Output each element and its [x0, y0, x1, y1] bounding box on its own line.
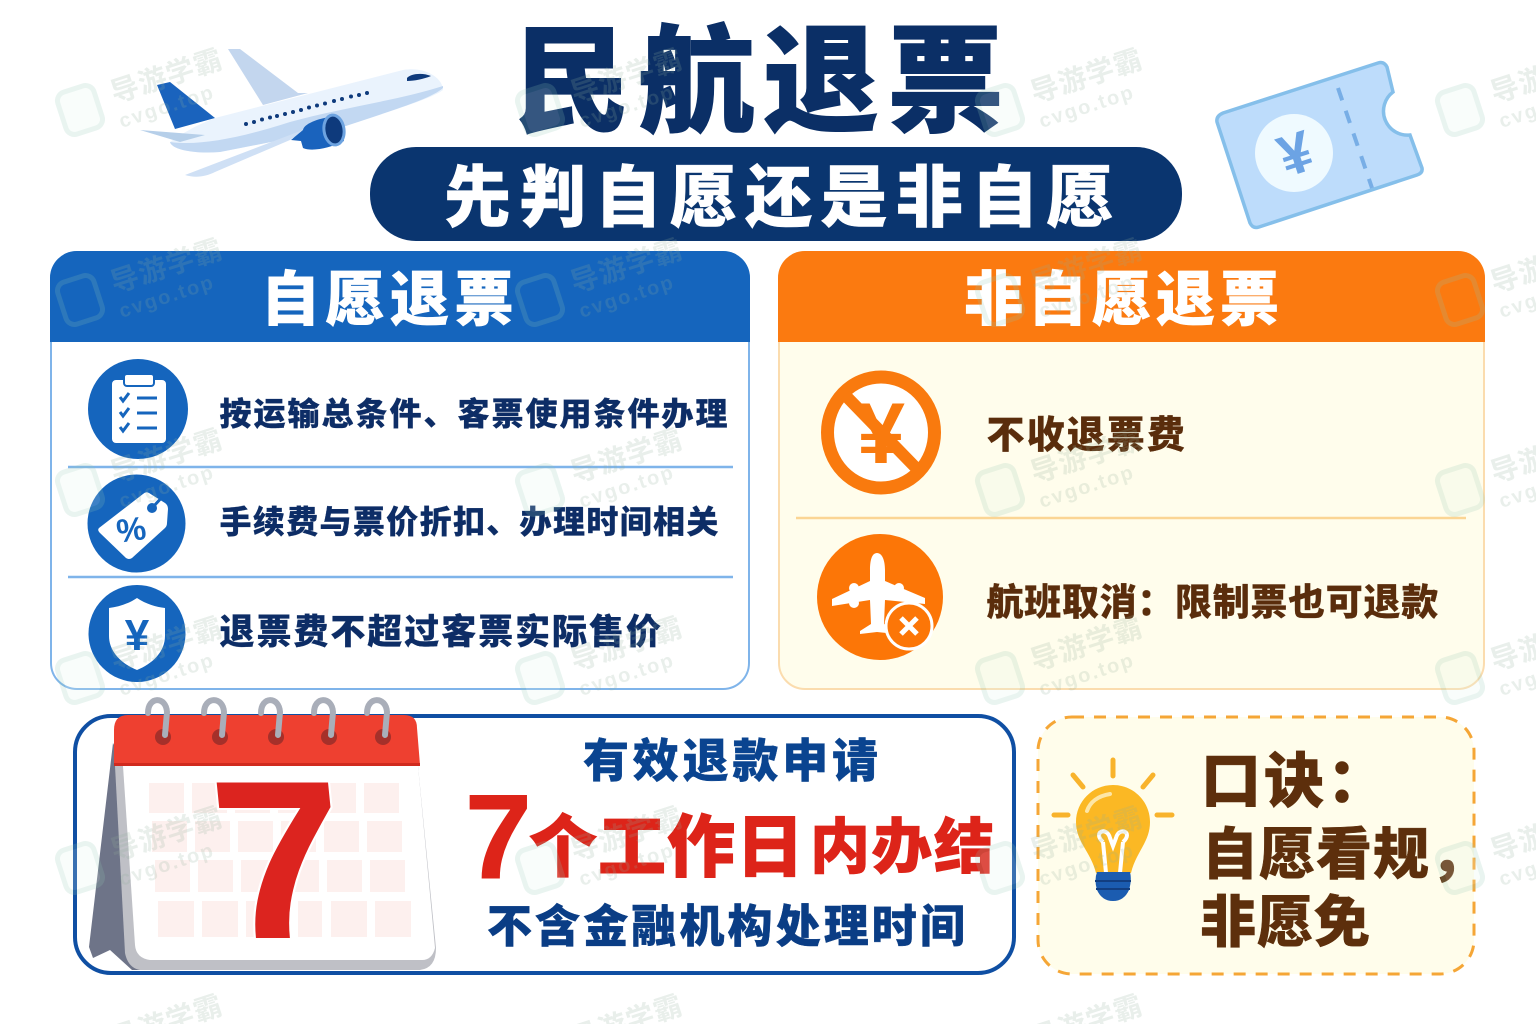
text: 7 working days: 个工作日: [529, 810, 805, 886]
panel: voluntary refund: [50, 251, 750, 689]
text: cvgo.top: [576, 461, 678, 513]
icon: no yen fee: [828, 377, 934, 488]
text: 7 working days: 内办结: [810, 814, 996, 881]
text: mnemonic line 2: 非愿免: [1200, 891, 1371, 954]
text: 导游学霸: [567, 801, 687, 867]
text: cvgo.top: [576, 81, 678, 133]
icon: clipboard checklist: [88, 359, 188, 459]
text: 导游学霸: [567, 43, 687, 109]
text: cvgo.top: [1036, 649, 1138, 701]
rule text cancelled: 航班取消：限制票也可退款: [986, 582, 1439, 623]
icon: shield yen: [88, 585, 186, 682]
rule text 1: 按运输总条件、客票使用条件办理: [220, 396, 730, 432]
text: excludes bank processing time: 不含金融机构处理时间: [487, 901, 968, 952]
icon: discount tag: %: [114, 509, 148, 550]
text: valid refund application: 有效退款申请: [583, 735, 882, 787]
rule text 3: 退票费不超过客票实际售价: [220, 612, 663, 652]
text: cvgo.top: [576, 649, 678, 701]
icon: light bulb: [1054, 760, 1172, 901]
text: cvgo.top: [1036, 81, 1138, 133]
subtitle pill: 先判自愿还是非自愿: [444, 161, 1122, 236]
icon: desk calendar: [89, 700, 436, 987]
text: 导游学霸: [107, 801, 227, 867]
title: 民航退票: [514, 17, 1012, 147]
text: cvgo.top: [116, 461, 218, 513]
heading: involuntary refund: 非自愿退票: [964, 267, 1284, 333]
text: cvgo.top: [576, 839, 678, 891]
text: 导游学霸: [1027, 43, 1147, 109]
text: 导游学霸: [567, 233, 687, 299]
icon: airplane: [140, 49, 443, 177]
text: cvgo.top: [576, 271, 678, 323]
rule text no fee: 不收退票费: [986, 415, 1187, 457]
text: 导游学霸: [567, 611, 687, 677]
icon: ticket with yen: [1217, 62, 1422, 228]
calendar digit 7: 7: [202, 735, 359, 987]
text: 导游学霸: [107, 43, 227, 109]
rule text 2: 手续费与票价折扣、办理时间相关: [220, 504, 720, 540]
icon: discount tag: [88, 474, 186, 572]
text: mnemonic line 1: 自愿看规，: [1202, 823, 1487, 886]
text: cvgo.top: [116, 271, 218, 323]
subtitle pill: [370, 147, 1182, 241]
icon: no yen fee: ¥: [857, 386, 905, 482]
text: 导游学霸: [1027, 233, 1147, 299]
text: cvgo.top: [1036, 461, 1138, 513]
text: 导游学霸: [1027, 423, 1147, 489]
panel: involuntary refund: [778, 251, 1485, 689]
text: 导游学霸: [107, 611, 227, 677]
text: cvgo.top: [1036, 839, 1138, 891]
text: cvgo.top: [116, 839, 218, 891]
text: 导游学霸: [567, 423, 687, 489]
panel header: voluntary: [50, 251, 750, 342]
text: 7 working days: 7: [465, 770, 532, 904]
panel: mnemonic tip: [1038, 717, 1487, 974]
text: 导游学霸: [107, 423, 227, 489]
text: 导游学霸: [107, 233, 227, 299]
text: 7 working days: [465, 770, 996, 904]
icon: ticket with yen: ¥: [1270, 118, 1321, 190]
text: cvgo.top: [116, 81, 218, 133]
icon: cancelled flight: [817, 534, 943, 660]
text: 导游学霸: [1027, 611, 1147, 677]
text: cvgo.top: [1036, 271, 1138, 323]
text: 导游学霸: [1027, 801, 1147, 867]
icon: shield yen: ¥: [125, 611, 150, 660]
text: mnemonic heading: 口诀：: [1201, 748, 1390, 815]
text: cvgo.top: [116, 649, 218, 701]
panel: 7 working days: [75, 700, 1014, 987]
heading: voluntary refund: 自愿退票: [261, 267, 519, 333]
panel header: involuntary: [778, 251, 1485, 342]
